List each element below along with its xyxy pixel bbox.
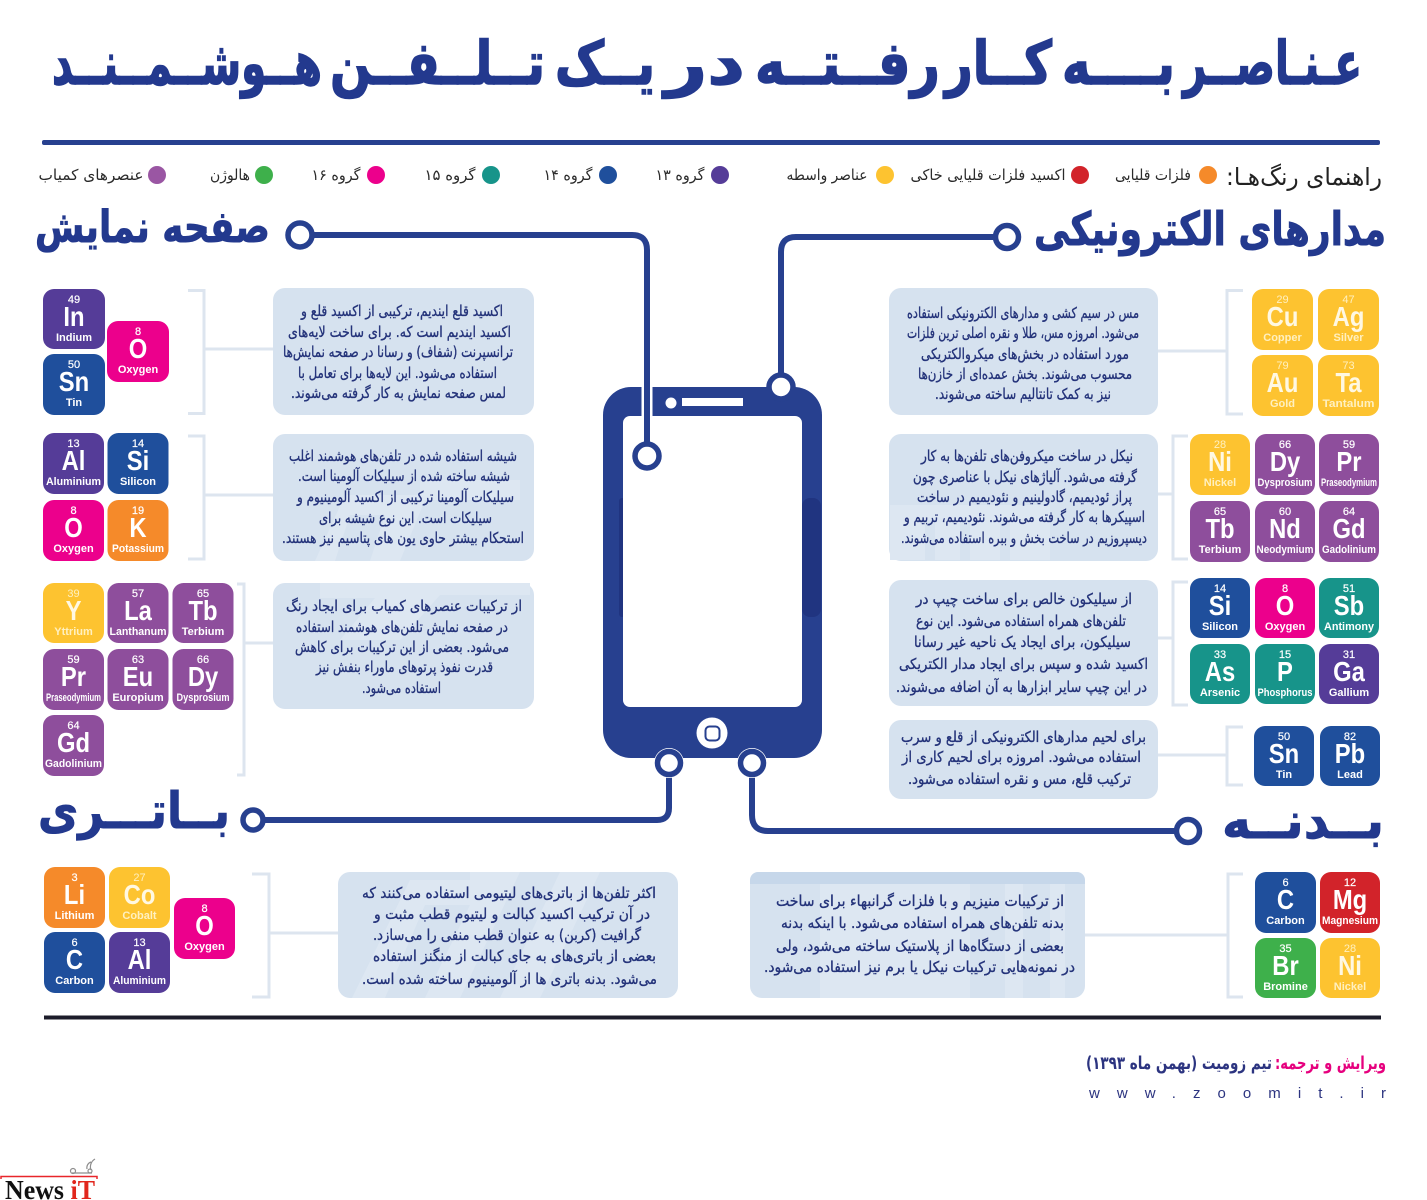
tile: Pr xyxy=(43,649,104,710)
text panel: سیلیکات است. این نوع شیشه برای xyxy=(319,509,492,527)
text panel: لمس صفحه نمایش به کار گرفته می‌شوند. xyxy=(291,384,506,402)
tile: K: K xyxy=(129,511,147,543)
tile: Ni: Nickel xyxy=(1334,981,1366,993)
text panel: سیلیکون، برای ایجاد یک ناحیه غیر رسانا xyxy=(914,633,1131,651)
tile: Al xyxy=(43,433,104,494)
title xyxy=(52,29,1362,99)
tile: Si: Si xyxy=(127,444,149,476)
tile: Gd xyxy=(1319,501,1379,562)
text panel: پراز ئودیمیم، گادولینیم و نئودیمیم در ساخت xyxy=(917,488,1132,507)
tile: Sn: Tin xyxy=(66,397,82,409)
tile: La: 57 xyxy=(132,588,144,600)
text panel: نیکل در ساخت میکروفن‌های تلفن‌ها به کار xyxy=(920,447,1133,465)
title: تــلــفــن xyxy=(330,29,545,99)
tile: Ag: Silver xyxy=(1334,332,1364,344)
tile: Dy: Dy xyxy=(1270,445,1301,477)
tile: Eu: Europium xyxy=(112,692,164,704)
bottom rule xyxy=(44,1016,1381,1020)
tile: In xyxy=(43,289,105,349)
tile: O: O xyxy=(64,511,83,543)
tile: Cu: 29 xyxy=(1276,294,1289,306)
tile: Sn: 50 xyxy=(1278,731,1290,743)
tile: Pr: Praseodymium xyxy=(46,692,101,704)
tile: Gd: 64 xyxy=(67,720,80,732)
legend item: group 15: گروه ۱۵ xyxy=(424,166,476,184)
tile: Ta xyxy=(1318,355,1379,416)
bracket xyxy=(1158,582,1188,705)
tile: Y: Y xyxy=(66,594,81,626)
text panel xyxy=(889,434,1158,561)
connector: circuits xyxy=(769,226,1018,399)
tile: Li: Lithium xyxy=(55,910,95,922)
tile: Ta: Tantalum xyxy=(1322,398,1375,410)
tile: Al: 13 xyxy=(133,937,146,949)
tile: Gd: 64 xyxy=(1343,506,1355,518)
tile: Li: 3 xyxy=(71,872,78,884)
text panel: در نمونه‌هایی ترکیبات نیکل یا برم نیز استفاده می‌شود. xyxy=(764,958,1075,976)
legend item: group 16: گروه ۱۶ xyxy=(312,166,361,184)
text panel: تلفن‌های همراه استفاده می‌شود. این نوع xyxy=(916,612,1126,630)
tile: O: 8 xyxy=(70,505,77,517)
tile: Al: Al xyxy=(62,444,85,476)
logo bar xyxy=(1,1176,97,1179)
tile: P: P xyxy=(1277,655,1293,687)
text panel: می‌شود. بعضی از این ترکیبات برای کاهش xyxy=(295,638,509,656)
tile: O: O xyxy=(195,909,214,941)
text panel: از ترکیبات منیزیم و با فلزات گرانبهاء برای ساخت xyxy=(776,892,1064,910)
bracket xyxy=(1158,290,1243,414)
text panel: در این چیپ سایر ابزارها به آن اضافه می‌شوند. xyxy=(896,678,1147,697)
tile: Sb: 51 xyxy=(1343,583,1355,595)
bracket xyxy=(1158,436,1188,559)
section: circuits copper silver gold tantalum xyxy=(889,288,1379,416)
title: رفــتــه xyxy=(755,29,940,99)
tile: Au: Au xyxy=(1267,366,1298,398)
tile: Mg: Magnesium xyxy=(1322,915,1378,927)
tile: Tb: Terbium xyxy=(1199,544,1242,556)
tile: Mg: Mg xyxy=(1333,883,1367,915)
tile: Au: 79 xyxy=(1276,360,1289,372)
connector: battery xyxy=(243,748,684,830)
text panel: نیز به کمک تانتالیم ساخته می‌شوند. xyxy=(935,385,1111,403)
tile: Pr: 59 xyxy=(67,654,80,666)
tile: Y: Yttrium xyxy=(54,626,93,638)
tile: Si: Silicon xyxy=(120,476,156,488)
tile: Ag: Ag xyxy=(1333,300,1364,332)
text panel: ترکیب قلع، مس و نقره استفاده می‌شود. xyxy=(908,770,1131,788)
tile: Ni: Nickel xyxy=(1204,477,1236,489)
tile: C: Carbon xyxy=(1266,915,1305,927)
tile: C: 6 xyxy=(1282,877,1289,889)
tile: O: O xyxy=(1276,589,1294,621)
tile: O xyxy=(43,500,104,561)
tile: Dy xyxy=(1255,434,1315,495)
text panel: استحکام بیشتر حاوی یون های پتاسیم نیز هستند. xyxy=(282,529,524,548)
tile: Co xyxy=(109,867,170,928)
tile: C: 6 xyxy=(71,937,78,949)
text panel xyxy=(273,434,534,561)
text panel: بعضی از باتری‌های به جای کبالت از منگنز استفاده xyxy=(373,947,656,965)
text panel: شیشه استفاده شده در تلفن‌های هوشمند اغلب xyxy=(289,447,517,465)
text panel xyxy=(750,872,1085,998)
legend item: transition elements: عناصر واسطه xyxy=(786,166,868,184)
text panel: گرافیت (کربن) به عنوان قطب منفی را می‌سازد. xyxy=(373,926,642,944)
tile: Pb: Pb xyxy=(1335,737,1365,769)
tile: Ni: 28 xyxy=(1344,943,1356,955)
text panel: برای لحیم مدارهای الکترونیکی از قلع و سرب xyxy=(901,728,1146,746)
tile: Pr xyxy=(1319,434,1379,495)
tile: Tb: Tb xyxy=(188,594,218,626)
text panel: در آن ترکیب اکسید کبالت و لیتیوم قطب مثبت و xyxy=(373,905,650,923)
tile: Tb: 65 xyxy=(1214,506,1226,518)
tile: Nd xyxy=(1255,501,1315,562)
tile: Gd: Gadolinium xyxy=(45,758,102,770)
text panel: از سیلیکون خالص برای ساخت چیپ در xyxy=(915,590,1132,609)
tile: Si: Si xyxy=(1209,589,1231,621)
credit: team and date: تیم زومیت (بهمن ماه ۱۳۹۳) xyxy=(1086,1053,1272,1074)
tile: Li: Li xyxy=(64,878,85,910)
tile: Sn: 50 xyxy=(68,359,80,371)
tile: As xyxy=(1190,644,1250,704)
tile: Pr: 59 xyxy=(1343,439,1355,451)
watermark logo: News iT xyxy=(1,1159,97,1200)
tile: O xyxy=(174,898,235,959)
tile: C xyxy=(1255,872,1316,933)
tile: Dy: 66 xyxy=(1279,439,1291,451)
text panel: دیسپروزیم در ساخت بخش و ببره استفاده می‌شوند. xyxy=(901,529,1147,548)
credit: editor label: ویرایش و ترجمه: xyxy=(1275,1053,1386,1074)
tile: As: 33 xyxy=(1214,649,1226,661)
legend item: group 14 xyxy=(544,166,617,184)
tile: Sb: Sb xyxy=(1334,589,1364,621)
text panel: از ترکیبات عنصرهای کمیاب برای ایجاد رنگ xyxy=(286,597,522,615)
tile: Cu xyxy=(1252,289,1313,350)
tile: Gd: Gd xyxy=(1332,512,1366,544)
text panel: ترانسپرنت (شفاف) و رسانا در صفحه نمایش‌ها xyxy=(283,343,513,362)
tile: C: Carbon xyxy=(55,975,94,987)
tile: Ga: Ga xyxy=(1333,655,1365,687)
tile: Tb: Terbium xyxy=(182,626,225,638)
tile: Sb: Antimony xyxy=(1324,621,1375,633)
tile: Dy: Dysprosium xyxy=(1258,477,1313,489)
text panel: اکسید قلع ایندیم، ترکیبی از اکسید قلع و xyxy=(300,302,503,320)
title rule xyxy=(42,140,1380,145)
title: یــک xyxy=(555,29,655,99)
tile: Dy: Dysprosium xyxy=(176,692,230,704)
tile: In: Indium xyxy=(56,332,92,344)
tile: As: Arsenic xyxy=(1200,687,1240,699)
tile: Tb xyxy=(1190,501,1250,562)
legend item: halogens: هالوژن xyxy=(210,166,250,184)
tile: Al: Al xyxy=(128,943,151,975)
tile: Ni: Ni xyxy=(1338,949,1362,981)
phone xyxy=(603,387,822,758)
tile: Nd: 60 xyxy=(1279,506,1291,518)
tile: Nd: Neodymium xyxy=(1256,544,1314,556)
tile: Br: Br xyxy=(1272,949,1299,981)
tile: Pb xyxy=(1320,726,1380,786)
tile: C xyxy=(44,932,105,993)
tile: K xyxy=(108,500,168,561)
tile: In: 49 xyxy=(68,294,80,306)
bracket xyxy=(1158,727,1243,785)
tile: Tb: Tb xyxy=(1205,512,1235,544)
tile: Dy xyxy=(172,649,234,710)
text panel: گرفته می‌شود. آلیاژهای نیکل با عناصری چون xyxy=(913,468,1138,486)
tile: Eu xyxy=(108,649,168,710)
credit xyxy=(1086,1053,1386,1074)
text panel xyxy=(889,288,1158,415)
tile: O: Oxygen xyxy=(1265,621,1305,633)
tile: Br xyxy=(1255,938,1316,998)
tile: Cu: Cu xyxy=(1267,300,1298,332)
tile: Cu: Copper xyxy=(1263,332,1302,344)
title: بــــه xyxy=(1062,29,1175,99)
text panel: بدنه تلفن‌های همراه استفاده می‌شود. با اینکه بدنه xyxy=(781,914,1064,932)
tile: Li xyxy=(44,867,105,928)
text panel xyxy=(889,720,1158,799)
text panel xyxy=(273,288,534,415)
legend heading: راهنمای رنگ‌هـا: xyxy=(1226,163,1382,191)
legend item: group 13: گروه ۱۳ xyxy=(656,166,705,184)
text panel: استفاده می‌شود. xyxy=(362,679,441,697)
tile: La xyxy=(108,583,168,643)
tile: Tb xyxy=(172,583,234,643)
tile: Mg: 12 xyxy=(1344,877,1356,889)
tile: Ta: 73 xyxy=(1342,360,1355,372)
tile: As: As xyxy=(1205,655,1235,687)
legend item: alkali metals: فلزات قلیایی xyxy=(1115,166,1191,184)
text panel: می‌شود. امروزه مس، طلا و نقره اصلی ترین فلزات xyxy=(907,324,1139,342)
tile: Pb: 82 xyxy=(1344,731,1356,743)
section: circuits silicon chip xyxy=(889,578,1379,706)
tile: Co: Cobalt xyxy=(122,910,157,922)
tile: P: Phosphorus xyxy=(1258,687,1312,699)
bracket xyxy=(188,436,273,559)
tile: O xyxy=(1255,578,1315,638)
text panel: اکسید ایندیم است که. برای ساخت لایه‌های xyxy=(288,323,511,341)
tile: Ni: Ni xyxy=(1208,445,1232,477)
legend item: rare earths: عنصرهای کمیاب xyxy=(38,166,144,184)
tile: Ga: Gallium xyxy=(1329,687,1369,699)
tile: Ta: Ta xyxy=(1336,366,1362,398)
legend item: group 13 xyxy=(656,166,729,184)
legend item: group 15 xyxy=(424,166,500,184)
tile: Co: Co xyxy=(124,878,155,910)
tile: Y: 39 xyxy=(67,588,80,600)
tile: Y xyxy=(43,583,104,643)
text panel xyxy=(889,580,1158,706)
tile: K: Potassium xyxy=(112,543,164,555)
tile: Eu: 63 xyxy=(132,654,144,666)
tile: Au xyxy=(1252,355,1313,416)
text panel: بعضی از دستگاه‌ها از پلاستیک ساخته می‌شود، ولی xyxy=(776,937,1064,956)
title: کــار xyxy=(943,29,1052,99)
section: body xyxy=(750,872,1380,998)
section: circuits nickel rare earths xyxy=(889,434,1379,562)
title: هــوشــمــنــد xyxy=(52,29,322,99)
legend item: group 14: گروه ۱۴ xyxy=(544,166,593,184)
tile: Si: Silicon xyxy=(1202,621,1238,633)
section: circuits solder xyxy=(889,720,1380,799)
tile: Co: 27 xyxy=(133,872,146,884)
tile: Pr: Pr xyxy=(61,660,86,692)
tile: P xyxy=(1255,644,1315,704)
tile: O: 8 xyxy=(1282,583,1288,595)
tile: Au: Gold xyxy=(1270,398,1295,410)
tile: Ni xyxy=(1190,434,1250,495)
tile: Sn: Sn xyxy=(59,365,89,397)
tile: Gd: Gadolinium xyxy=(1322,544,1376,556)
tile: Ni xyxy=(1320,938,1380,998)
tile: Sn: Sn xyxy=(1269,737,1299,769)
text panel: اکسید شده و سپس برای ایجاد مدار الکتریکی xyxy=(899,655,1148,674)
tile: O: 8 xyxy=(201,903,208,915)
text panel: مورد استفاده در بخش‌های میکروالکتریکی xyxy=(921,345,1129,363)
tile: O: 8 xyxy=(135,326,141,338)
tile: Mg xyxy=(1320,872,1380,933)
text panel: اکثر تلفن‌ها از باتری‌های لیتیومی استفاده می‌کنند که xyxy=(362,884,656,902)
tile: C: C xyxy=(1277,883,1294,915)
tile: Al: Aluminium xyxy=(113,975,166,987)
tile: Tb: 65 xyxy=(197,588,209,600)
title: در xyxy=(661,29,745,99)
tile: Si: 14 xyxy=(1214,583,1226,595)
tile: Eu: Eu xyxy=(123,660,153,692)
tile: Si xyxy=(108,433,168,494)
text panel: اسپیکرها به کار گرفته می‌شوند. نئودیمیم، تربیم و xyxy=(903,508,1145,527)
text panel: استفاده می‌شود. امروزه برای لحیم کاری از xyxy=(901,748,1141,766)
tile: Al: Aluminium xyxy=(46,476,101,488)
tile: O: Oxygen xyxy=(184,941,225,953)
bracket xyxy=(188,290,273,414)
tile: Ga: 31 xyxy=(1343,649,1355,661)
heading: battery: بــاتـــری xyxy=(38,782,230,841)
text panel: می‌شود. بدنه باتری ها از آلومینیوم ساخته شده است. xyxy=(362,970,657,988)
tile: Si xyxy=(1190,578,1250,638)
heading: display: صفحه نمایش xyxy=(35,202,270,253)
tile: Sb xyxy=(1319,578,1379,638)
bracket xyxy=(252,874,338,997)
tile: Pr: Praseodymium xyxy=(1321,477,1377,489)
tile: O: Oxygen xyxy=(53,543,94,555)
tile: Sn xyxy=(43,354,105,415)
tile: Nd: Nd xyxy=(1269,512,1301,544)
tile: C: C xyxy=(66,943,83,975)
tile: Ag xyxy=(1318,289,1379,350)
tile: Al xyxy=(109,932,170,993)
text panel: سیلیکات آلومینا ترکیبی از اکسید آلومینیوم و xyxy=(296,488,514,506)
text panel: استفاده می‌شود. این لایه‌ها برای تعامل با xyxy=(298,364,497,382)
section: display glass xyxy=(43,433,534,561)
tile: Dy: 66 xyxy=(197,654,209,666)
tile: In: In xyxy=(63,300,85,332)
logo icon xyxy=(70,1159,95,1174)
tile: Dy: Dy xyxy=(188,660,219,692)
tile: K: 19 xyxy=(132,505,144,517)
legend item: alkaline earth: اکسید فلزات قلیایی خاکی xyxy=(910,166,1066,184)
tile: Al: 13 xyxy=(67,438,80,450)
tile: Ag: 47 xyxy=(1342,294,1355,306)
text panel: در صفحه نمایش تلفن‌های هوشمند استفاده xyxy=(296,618,508,636)
tile: La: Lanthanum xyxy=(110,626,167,638)
section: display rare earths xyxy=(43,583,534,776)
bracket xyxy=(237,584,273,775)
legend item: halogens xyxy=(210,166,273,184)
website: www.zoomit.ir xyxy=(1088,1085,1386,1102)
tile: Ga xyxy=(1319,644,1379,704)
tile: O xyxy=(107,321,169,382)
tile: Sn xyxy=(1254,726,1314,786)
section: battery xyxy=(44,867,678,998)
tile: Gd xyxy=(43,715,104,776)
heading: body: بــدنــه xyxy=(1222,792,1384,850)
text panel: مس در سیم کشی و مدارهای الکترونیکی استفاده xyxy=(907,304,1139,322)
text panel: شیشه ساخته شده از سیلیکات آلومینا است. xyxy=(298,467,510,485)
tile: Pr: Pr xyxy=(1336,445,1362,477)
text panel xyxy=(338,872,678,998)
tile: P: 15 xyxy=(1279,649,1291,661)
color legend xyxy=(38,163,1382,191)
legend item: group 16 xyxy=(312,166,385,184)
connector: display xyxy=(288,223,659,468)
section: display indium tin oxide xyxy=(43,288,534,415)
text panel: قدرت نفوذ پرتوهای ماوراء بنفش نیز xyxy=(315,658,493,677)
tile: Ni: 28 xyxy=(1214,439,1226,451)
bracket xyxy=(1085,874,1243,997)
tile: O: O xyxy=(129,332,147,364)
tile: La: La xyxy=(124,594,152,626)
tile: Br: 35 xyxy=(1279,943,1292,955)
tile: O: Oxygen xyxy=(118,364,158,376)
tile: Sn: Tin xyxy=(1276,769,1292,781)
tile: Si: 14 xyxy=(132,438,144,450)
tile: Gd: Gd xyxy=(57,726,90,758)
tile: Br: Bromine xyxy=(1263,981,1308,993)
text panel xyxy=(273,583,534,709)
tile: Pb: Lead xyxy=(1337,769,1363,781)
text panel: محسوب می‌شوند. بخش عمده‌ای از خازن‌ها xyxy=(918,365,1132,383)
connector: body xyxy=(737,748,1200,842)
